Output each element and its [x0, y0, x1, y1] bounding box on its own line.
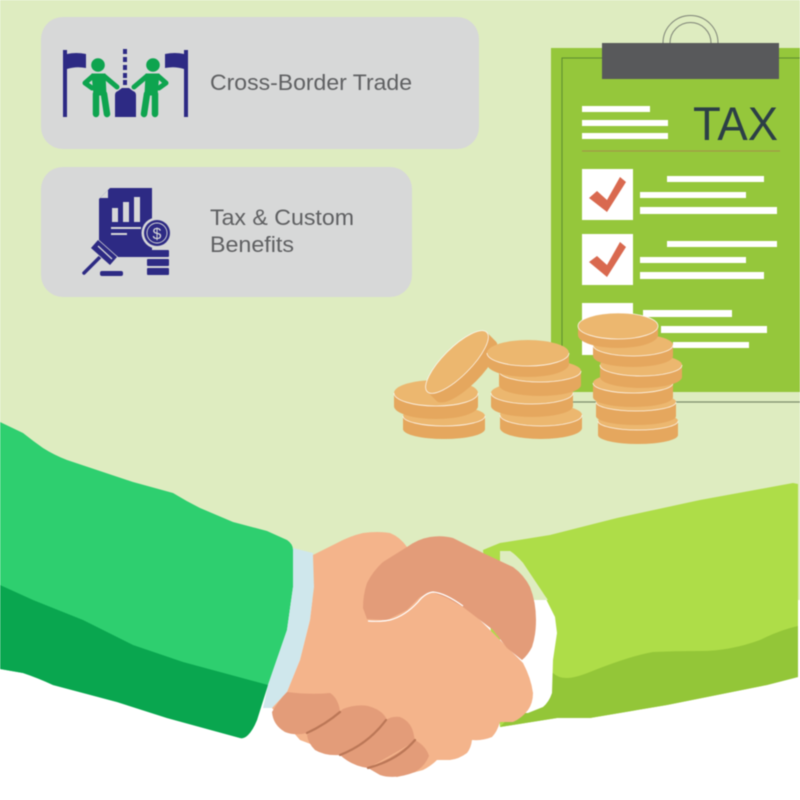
- grip line: [368, 592, 463, 621]
- upper hand: [363, 536, 536, 660]
- lower hand: [272, 532, 533, 777]
- checkbox two: [582, 234, 633, 285]
- label: cross-border trade: Cross-Border Trade: [210, 70, 412, 95]
- coin stack left: [394, 322, 506, 439]
- handshake: [272, 532, 536, 777]
- icon: two people at a border: [63, 49, 188, 117]
- panel: tax and custom benefits: [41, 167, 412, 297]
- label: tax and custom benefits: Tax & Custom: [210, 205, 354, 230]
- clipboard: tax checklist: [551, 16, 800, 402]
- checkbox three: [582, 303, 633, 355]
- left sleeve: [0, 422, 314, 738]
- fingers: [272, 692, 429, 777]
- coin stack right: [578, 313, 682, 444]
- finger creases: [307, 712, 415, 768]
- label: tax and custom benefits: [210, 205, 354, 257]
- coin stack middle: [487, 340, 582, 439]
- icon: document, gavel and coins: [84, 188, 172, 276]
- icon: document, gavel and coins: $: [153, 226, 162, 243]
- right sleeve: [483, 483, 798, 727]
- heading: tax: TAX: [693, 97, 778, 150]
- panel: cross-border trade: [41, 17, 479, 149]
- coin stacks: [394, 313, 682, 444]
- right shirt cuff: [500, 551, 557, 713]
- label: tax and custom benefits: Benefits: [210, 232, 294, 257]
- checkbox one: [582, 169, 633, 220]
- left shirt cuff: [263, 548, 314, 708]
